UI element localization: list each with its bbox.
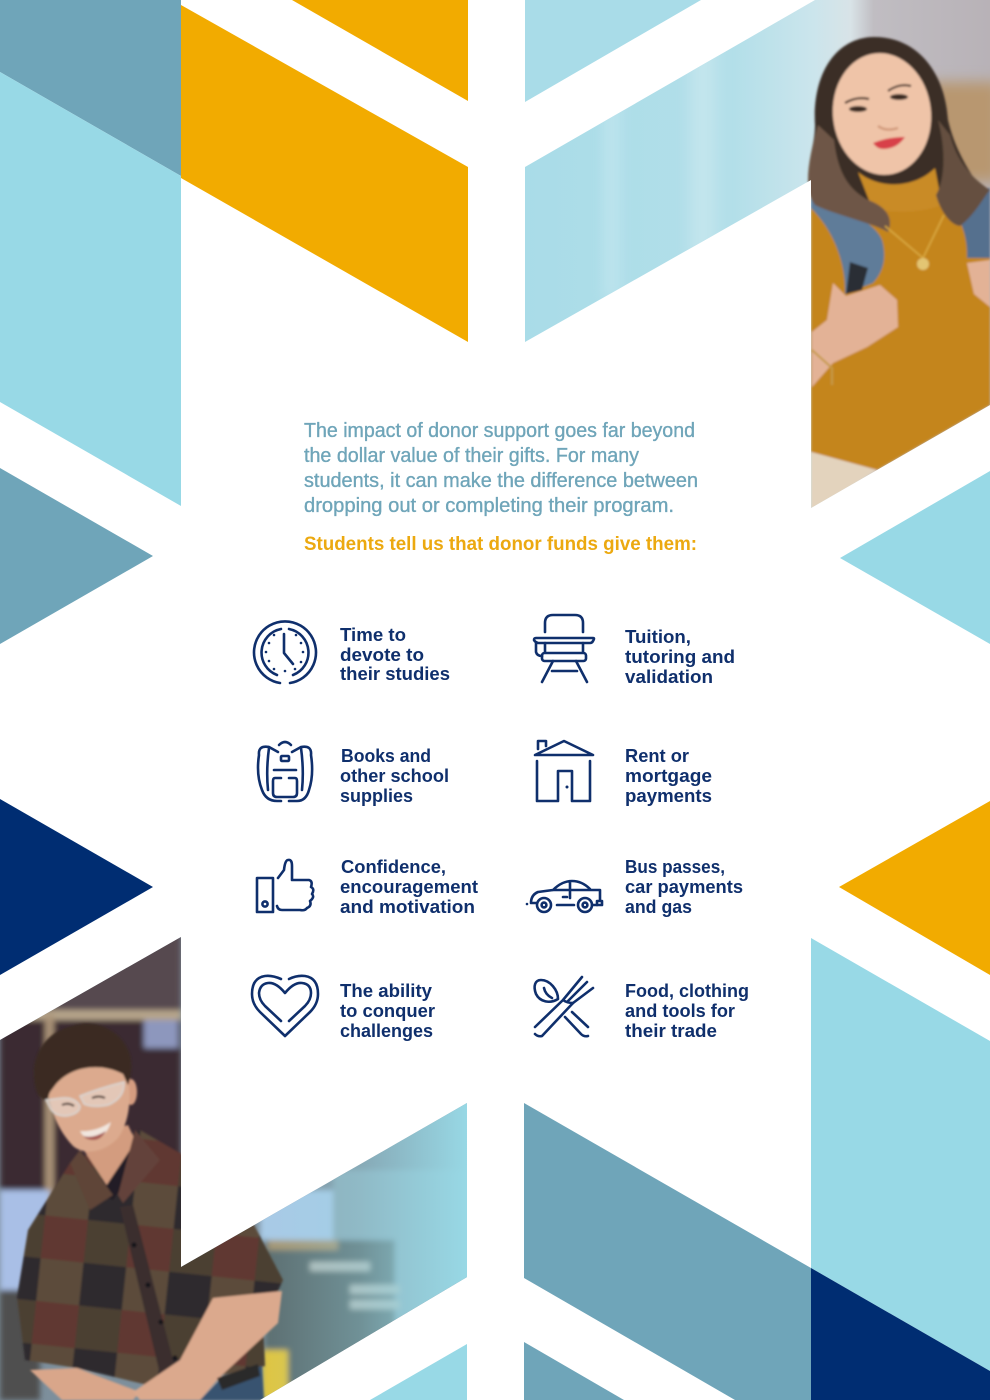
text: and tools for <box>625 1001 735 1021</box>
text: car payments <box>625 877 743 897</box>
text <box>625 981 749 1041</box>
intro paragraph: dropping out or completing their program. <box>304 495 674 517</box>
shirt <box>17 1130 283 1388</box>
icon: house <box>535 741 593 801</box>
geometric panel: top-left teal and light blue <box>0 0 181 506</box>
item: books and supplies <box>258 742 449 806</box>
left arm <box>30 1368 140 1400</box>
text: Bus passes, <box>625 857 725 877</box>
text: Rent or <box>625 746 689 766</box>
text: devote to <box>340 645 424 665</box>
geometric panel: right gold triangle <box>839 801 990 975</box>
neck <box>84 1124 135 1186</box>
icon: spoon and fork <box>535 977 593 1036</box>
icon: school desk <box>534 615 594 682</box>
item: confidence <box>257 857 478 917</box>
undershirt <box>106 1151 130 1198</box>
text: validation <box>625 667 713 687</box>
forearm <box>133 1291 282 1400</box>
photo: student in plaid shirt <box>0 930 473 1400</box>
sweater <box>811 200 990 470</box>
item: rent or mortgage <box>535 741 712 806</box>
necklace <box>885 215 944 258</box>
text: challenges <box>340 1021 433 1041</box>
turtleneck <box>858 168 942 212</box>
text: Books and <box>341 746 431 766</box>
text: Food, clothing <box>625 981 749 1001</box>
belt <box>217 1364 260 1390</box>
jeans <box>200 1366 264 1400</box>
text <box>625 746 712 806</box>
icon: thumbs up <box>257 860 313 912</box>
geometric panel: left teal triangle <box>0 468 153 644</box>
back hair <box>812 35 972 202</box>
icon: car <box>527 881 602 912</box>
geometric panel: right light blue triangle <box>840 471 990 644</box>
item: ability to conquer challenges <box>252 976 435 1041</box>
intro paragraph <box>304 420 698 517</box>
geometric panel: top gold bands <box>181 0 468 342</box>
trousers <box>811 452 877 512</box>
text: encouragement <box>340 877 478 897</box>
backpack straps <box>811 196 884 294</box>
geometric panel: bottom right blocks <box>524 938 990 1400</box>
text: Time to <box>340 625 406 645</box>
geometric panel: top centre light blue triangle <box>525 0 701 102</box>
smile <box>80 1122 111 1140</box>
text: Tuition, <box>625 627 691 647</box>
photo: student with backpack <box>525 0 990 520</box>
placket <box>121 1206 174 1371</box>
hair <box>34 1024 131 1102</box>
item: tuition <box>534 615 735 687</box>
text: their trade <box>625 1021 717 1041</box>
text: supplies <box>340 786 413 806</box>
glasses <box>46 1082 124 1116</box>
intro paragraph: the dollar value of their gifts. For many <box>304 445 639 467</box>
icon: clock <box>254 621 316 683</box>
text <box>340 981 435 1041</box>
item: time to devote to studies <box>254 621 450 684</box>
gold subheading: Students tell us that donor funds give them: <box>304 534 697 555</box>
hands and arm <box>812 283 898 387</box>
item: food, clothing and tools <box>535 977 749 1041</box>
text: The ability <box>340 981 432 1001</box>
text <box>340 857 478 917</box>
left hair lock <box>808 125 890 232</box>
text: tutoring and <box>625 647 735 667</box>
item: bus passes and car <box>527 857 743 917</box>
text <box>340 625 450 684</box>
ear <box>125 1079 137 1105</box>
text: other school <box>340 766 449 786</box>
bracelet <box>812 350 832 385</box>
text: to conquer <box>340 1001 435 1021</box>
geometric panel: bottom centre light blue fragment <box>370 1344 467 1400</box>
text <box>625 857 743 917</box>
text: Confidence, <box>341 857 446 877</box>
intro paragraph: The impact of donor support goes far beyond <box>304 420 695 442</box>
text: and motivation <box>340 897 475 917</box>
text: payments <box>625 786 712 806</box>
icon: heart <box>252 976 318 1036</box>
eyes and brows <box>845 85 911 103</box>
intro paragraph: students, it can make the difference between <box>304 470 698 492</box>
right hair lock <box>936 120 990 226</box>
text: and gas <box>625 897 692 917</box>
collar <box>70 1150 113 1210</box>
text <box>340 746 449 806</box>
face <box>830 51 934 177</box>
face <box>48 1067 130 1152</box>
text <box>625 627 735 687</box>
icon: backpack <box>258 742 312 801</box>
geometric panel: left navy triangle <box>0 799 153 975</box>
text: mortgage <box>625 766 712 786</box>
text: their studies <box>340 664 450 684</box>
